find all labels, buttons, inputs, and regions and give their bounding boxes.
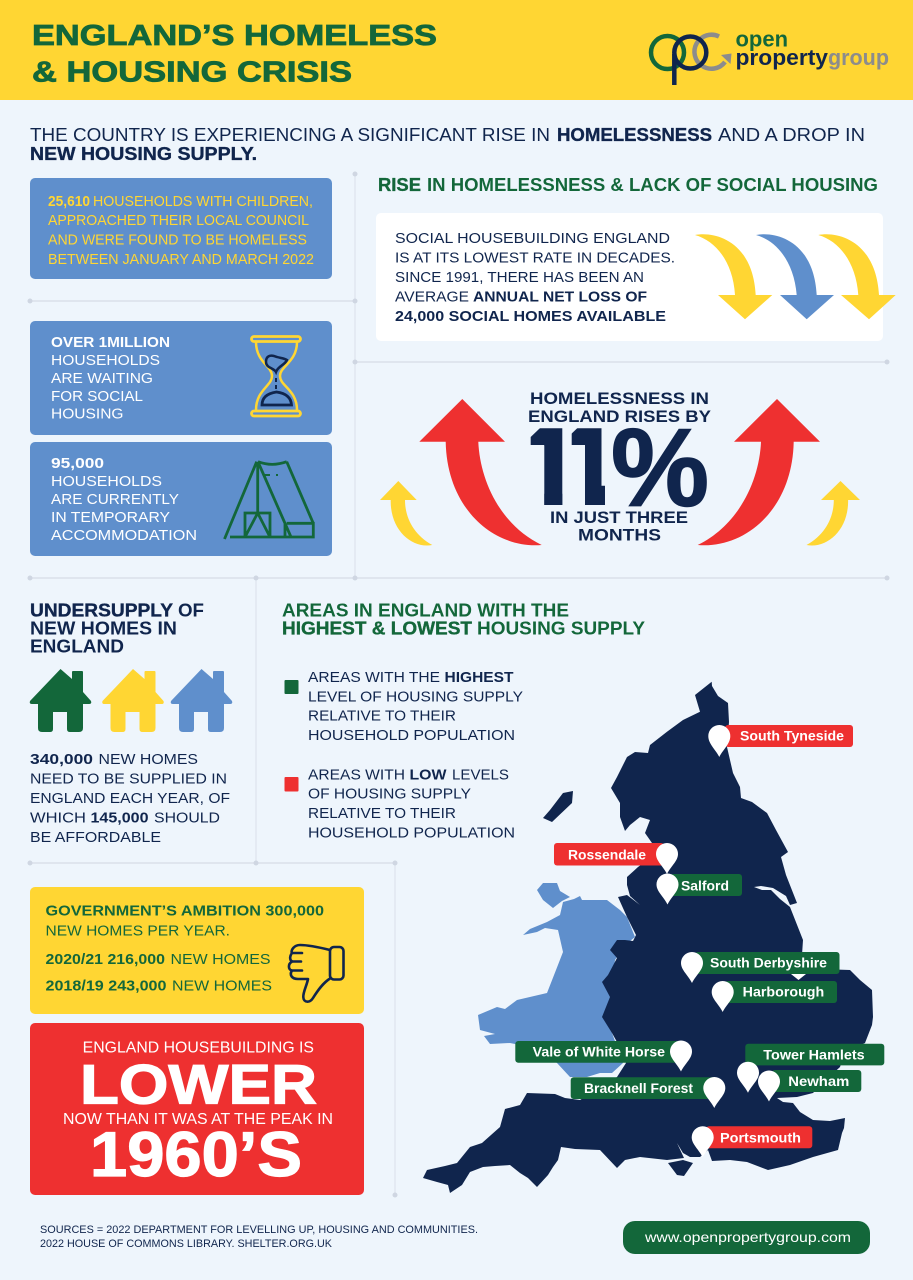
label: Tower Hamlets [737, 1044, 884, 1093]
text block: 340,000 new homes: 340,000 [30, 751, 93, 768]
heading: areas in england: AREAS IN ENGLAND WITH THE [282, 600, 569, 620]
panel: lower than 1960s: NOW THAN IT WAS AT THE PEAK IN [63, 1111, 333, 1128]
logo: open property group: group [828, 45, 889, 70]
title: & HOUSING CRISIS [32, 56, 352, 88]
text block: 340,000 new homes: 145,000 [90, 810, 148, 826]
map: Isle of Wight [668, 1160, 693, 1176]
legend: highest supply: HIGHEST [444, 669, 514, 686]
label: South Derbyshire: South Derbyshire [710, 954, 827, 970]
label: South Derbyshire [681, 952, 840, 983]
text block: social housebuilding: 24,000 SOCIAL HOMES AVAILABLE [395, 308, 666, 325]
heading: undersupply: NEW HOMES IN [30, 618, 177, 638]
intro heading: HOMELESSNESS [557, 125, 712, 145]
panel: 25,610 households: BETWEEN JANUARY AND MARCH 2022 [48, 251, 314, 268]
panel: over 1 million households: HOUSING [51, 406, 124, 422]
heading: areas in england [282, 600, 645, 638]
panel: over 1 million households [30, 321, 332, 435]
sources: 2022 HOUSE OF COMMONS LIBRARY. SHELTER.ORG.UK [40, 1238, 333, 1250]
panel: government ambition: GOVERNMENT’S AMBITION 300,000 [46, 903, 324, 920]
label: Portsmouth [692, 1126, 812, 1157]
logo: open property group: property [736, 45, 829, 70]
panel: lower than 1960s [30, 1023, 364, 1195]
sources: SOURCES = 2022 DEPARTMENT FOR LEVELLING UP, HOUSING AND COMMUNITIES. [40, 1224, 478, 1236]
panel: 25,610 households: HOUSEHOLDS WITH CHILDREN, [93, 193, 313, 210]
text block: social housebuilding: SINCE 1991, THERE HAS BEEN AN [395, 269, 644, 286]
panel: 95,000 households: ACCOMMODATION [51, 527, 197, 544]
text block: 340,000 new homes: NEED TO BE SUPPLIED IN [30, 770, 227, 788]
panel: social housebuilding [376, 213, 896, 341]
graphic: homelessness rises 11% [380, 389, 860, 546]
intro heading: AND A DROP IN [718, 125, 865, 145]
arrow: small yellow right [806, 481, 860, 546]
label: Newham [758, 1070, 861, 1102]
intro heading: THE COUNTRY IS EXPERIENCING A SIGNIFICANT RISE IN [30, 125, 550, 145]
header band [0, 0, 913, 100]
panel: government ambition: 2018/19 243,000 [46, 978, 166, 995]
panel: lower than 1960s: LOWER [80, 1052, 317, 1116]
big number 11% [530, 428, 707, 508]
label: South Tyneside [708, 725, 853, 757]
heading: areas in england: HIGHEST & LOWEST [282, 618, 472, 638]
intro heading: NEW HOUSING SUPPLY. [30, 144, 257, 164]
panel: lower than 1960s: ENGLAND HOUSEBUILDING IS [83, 1040, 314, 1057]
arrow: small yellow left [380, 481, 432, 546]
panel: government ambition: NEW HOMES PER YEAR. [46, 922, 230, 939]
title: ENGLAND’S HOMELESS [32, 20, 437, 52]
panel: government ambition: 2020/21 216,000 [46, 951, 165, 968]
legend: low supply: LEVELS [452, 766, 509, 783]
text block: 340,000 new homes: SHOULD [154, 810, 220, 826]
legend: highest supply: HOUSEHOLD POPULATION [308, 727, 515, 744]
panel: 95,000 households: ARE CURRENTLY [51, 491, 179, 508]
panel: over 1 million households: FOR SOCIAL [51, 388, 143, 405]
legend: low supply: OF HOUSING SUPPLY [308, 786, 471, 803]
label: Tower Hamlets: Tower Hamlets [763, 1046, 865, 1062]
text block: 340,000 new homes: ENGLAND EACH YEAR, OF [30, 790, 230, 807]
legend: low supply: HOUSEHOLD POPULATION [308, 825, 515, 842]
panel: government ambition: NEW HOMES [170, 951, 270, 968]
sources [40, 1224, 478, 1250]
text: in just three months: MONTHS [578, 526, 661, 544]
map of England and Wales [423, 682, 873, 1193]
legend: low supply: RELATIVE TO THEIR [308, 805, 456, 822]
text: in just three months: IN JUST THREE [550, 508, 688, 527]
panel: government ambition [30, 887, 364, 1014]
legend: low supply [284, 766, 515, 842]
label: Vale of White Horse [515, 1040, 692, 1072]
label: Harborough [712, 981, 837, 1012]
heading: undersupply [30, 600, 204, 656]
panel: 95,000 households: 95,000 [51, 455, 104, 472]
arrow: large red left [419, 399, 542, 545]
text: in just three months [550, 508, 688, 544]
text block: 340,000 new homes: NEW HOMES [98, 751, 198, 768]
label: South Tyneside: South Tyneside [740, 728, 844, 744]
heading: areas in england: HOUSING SUPPLY [477, 618, 645, 638]
text block: social housebuilding [395, 230, 675, 325]
heading: undersupply: ENGLAND [30, 636, 124, 656]
panel: 25,610 households [30, 178, 332, 279]
icon: hourglass [252, 336, 300, 416]
legend: highest supply: LEVEL OF HOUSING SUPPLY [308, 688, 523, 705]
label: Bracknell Forest [571, 1077, 725, 1108]
panel: over 1 million households: OVER 1MILLION [51, 334, 170, 351]
icon: three down arrows [695, 234, 896, 319]
label: Newham: Newham [788, 1073, 849, 1089]
heading: undersupply: OF [178, 600, 204, 620]
panel: over 1 million households: HOUSEHOLDS [51, 352, 160, 369]
legend: low supply: AREAS WITH [308, 766, 405, 783]
text: homelessness in england: ENGLAND RISES BY [528, 407, 712, 426]
intro heading [30, 125, 865, 164]
panel: over 1 million households: ARE WAITING [51, 370, 153, 387]
label: Salford [656, 874, 742, 904]
heading: rise in homelessness: IN HOMELESSNESS & LACK OF SOCIAL HOUSING [427, 175, 878, 195]
label: Salford: Salford [681, 878, 729, 894]
text block: social housebuilding: AVERAGE [395, 288, 469, 306]
logo: open property group [651, 26, 889, 85]
legend: highest supply [284, 669, 523, 744]
map: Isle of Man [543, 791, 573, 822]
legend: highest supply: RELATIVE TO THEIR [308, 708, 456, 725]
text block: 340,000 new homes: BE AFFORDABLE [30, 829, 161, 846]
icon: tent [224, 462, 313, 539]
heading: rise in homelessness: RISE [378, 175, 421, 195]
title [32, 20, 437, 88]
website pill: www.openpropertygroup.com [644, 1229, 851, 1245]
heading: undersupply: UNDERSUPPLY [30, 600, 173, 620]
legend: low supply: LOW [410, 766, 447, 783]
panel: 95,000 households [30, 442, 332, 556]
big number 11%: 11 [531, 406, 610, 529]
icon: thumbs down [289, 945, 344, 1002]
big number 11%: % [611, 406, 709, 530]
text block: social housebuilding: IS AT ITS LOWEST RATE IN DECADES. [395, 250, 675, 266]
label: Harborough: Harborough [743, 984, 824, 1000]
panel: lower than 1960s: 1960’S [90, 1120, 302, 1190]
panel: 95,000 households: HOUSEHOLDS [51, 473, 162, 490]
panel: 25,610 households: APPROACHED THEIR LOCAL COUNCIL [48, 212, 309, 229]
text block: social housebuilding: SOCIAL HOUSEBUILDING ENGLAND [395, 230, 670, 247]
text block: 340,000 new homes [30, 751, 230, 846]
icon: three houses [30, 669, 232, 732]
panel: 25,610 households: AND WERE FOUND TO BE HOMELESS [48, 232, 307, 248]
panel: government ambition: NEW HOMES [172, 978, 272, 995]
text block: social housebuilding: ANNUAL NET LOSS OF [473, 288, 647, 306]
label: Vale of White Horse: Vale of White Horse [533, 1043, 665, 1059]
panel: 95,000 households: IN TEMPORARY [51, 509, 170, 526]
label: Rossendale: Rossendale [568, 846, 646, 862]
logo: open property group: open [736, 26, 788, 52]
map: small hidden pin [791, 974, 806, 980]
label: Portsmouth: Portsmouth [720, 1129, 801, 1145]
text: homelessness in england [528, 389, 712, 426]
label: Rossendale [554, 843, 678, 874]
legend: highest supply: AREAS WITH THE [308, 669, 440, 686]
text block: 340,000 new homes: WHICH [30, 810, 86, 826]
text: homelessness in england: HOMELESSNESS IN [530, 389, 709, 408]
arrow: large red right [698, 399, 820, 545]
map: England [423, 682, 873, 1193]
map: Wales [478, 883, 635, 1077]
panel: 25,610 households: 25,610 [48, 193, 90, 210]
website pill [623, 1221, 870, 1254]
label: Bracknell Forest: Bracknell Forest [584, 1080, 693, 1096]
